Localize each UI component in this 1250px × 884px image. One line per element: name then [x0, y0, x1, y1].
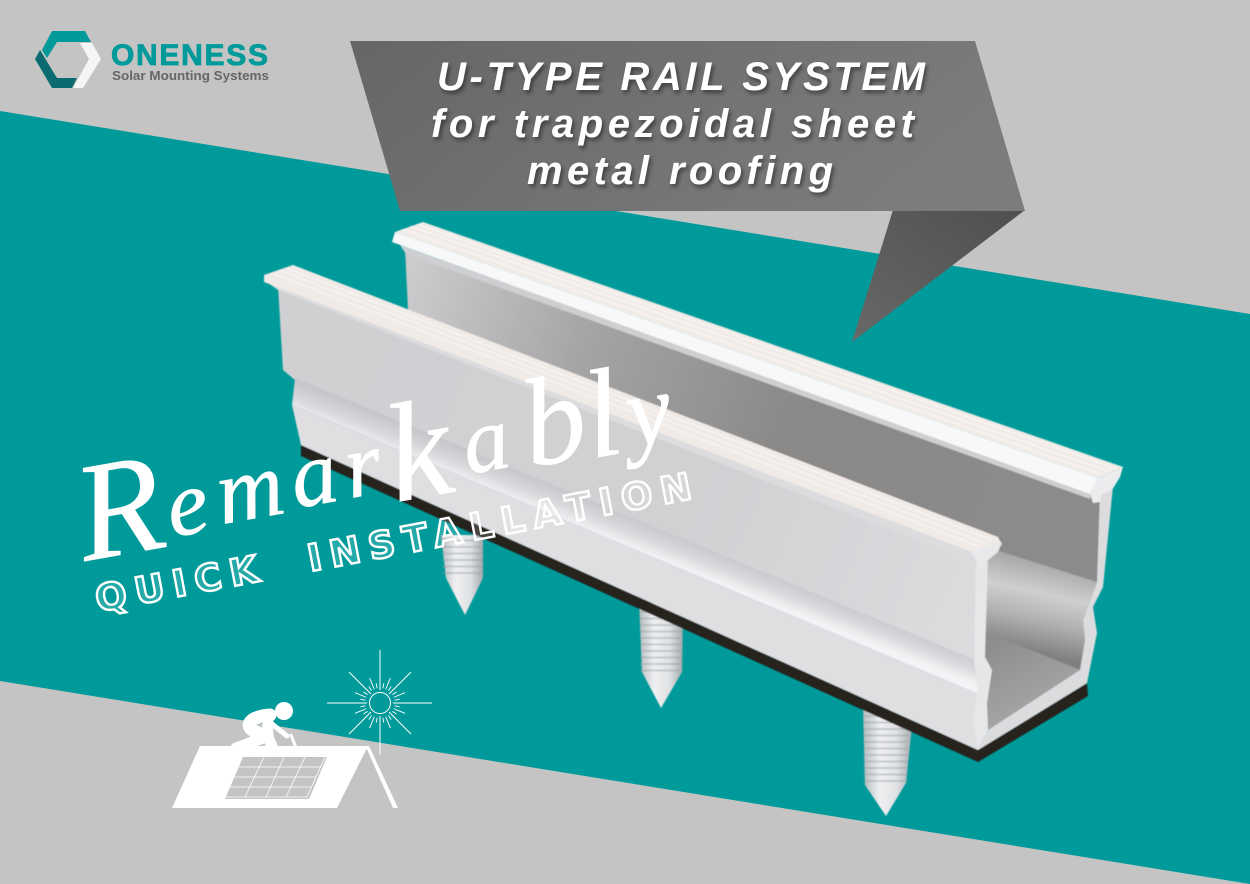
subheading: Quick Installation: QUICK INSTALLATION: [92, 465, 695, 621]
logo: [35, 31, 269, 88]
icon: hexagon logo: [35, 31, 101, 88]
inner curved wall: [980, 545, 1097, 670]
headline: Remarkably: m: [208, 432, 291, 544]
title: [431, 55, 927, 193]
far cap end face: [1090, 467, 1123, 503]
headline: Remarkably: y: [608, 352, 680, 470]
headline: Remarkably: e: [158, 449, 216, 557]
channel floor: [980, 630, 1080, 730]
logo wordmark: ONENESS: [111, 39, 268, 72]
far cap underside: [400, 245, 1090, 499]
cap ribs: [272, 224, 1117, 546]
headline: Remarkably: b: [511, 348, 596, 495]
worker: [236, 702, 298, 753]
screw 1: [441, 535, 483, 615]
near wall end face: [972, 556, 992, 750]
icon: worker installing solar panels on roof: [172, 650, 432, 808]
title: metal roofing: [527, 149, 833, 193]
far cap top: [395, 222, 1123, 478]
far wall end face: [978, 486, 1113, 750]
roof: [172, 746, 368, 808]
callout: title banner: [350, 41, 1025, 342]
headline: Remarkably: l: [573, 344, 631, 486]
black base gasket: [301, 445, 1088, 762]
rear wall inside: [405, 248, 1103, 582]
callout body: [350, 41, 1025, 211]
logo tagline: Solar Mounting Systems: [112, 69, 269, 83]
near cap end face: [970, 542, 1002, 564]
screw 3: [863, 705, 912, 816]
near wall face: [278, 286, 978, 662]
title: U-TYPE RAIL SYSTEM: [437, 55, 927, 99]
headline: Remarkably: [62, 344, 680, 592]
solar panel: [225, 757, 327, 799]
headline: Remarkably: k: [374, 369, 465, 533]
sun: [327, 650, 432, 755]
product: U-type rail with screws: [264, 222, 1123, 816]
near wall groove: [292, 378, 985, 697]
headline: Remarkably: r: [336, 411, 390, 518]
near cap side: [264, 280, 978, 564]
headline: Remarkably: a: [454, 385, 517, 494]
callout tail: [852, 210, 1025, 342]
screw 2: [639, 600, 683, 708]
far cap edge: [392, 232, 1098, 494]
near wall lower skirt: [292, 405, 985, 750]
near cap top: [264, 265, 1002, 556]
title: for trapezoidal sheet: [431, 102, 916, 146]
headline: Remarkably: a: [282, 419, 345, 528]
roof gable: [366, 746, 398, 808]
headline: Remarkably: R: [62, 424, 175, 592]
